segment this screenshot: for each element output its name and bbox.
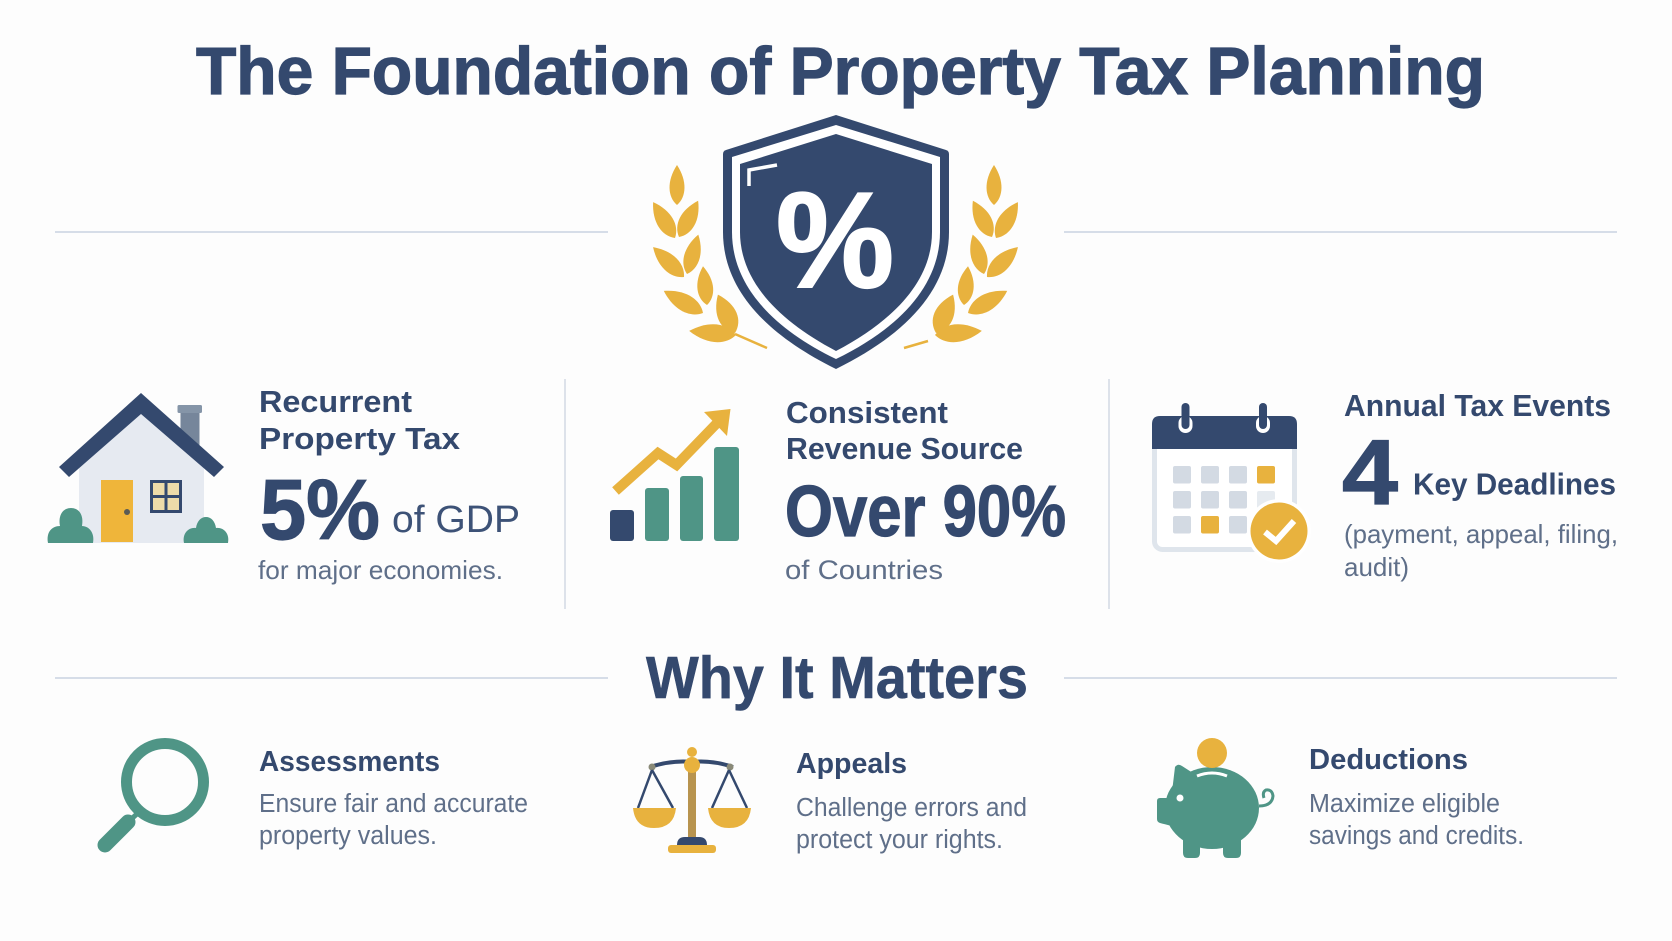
item: appeals: [633, 747, 1027, 854]
heading: annual tax events: Annual Tax Events: [1344, 388, 1611, 423]
icon: piggy bank: [1157, 738, 1273, 858]
note: of Countries: [785, 555, 943, 585]
description: Maximize eligible: [1309, 790, 1500, 818]
right laurel: [904, 165, 1025, 348]
description: Challenge errors and: [796, 794, 1027, 822]
stat: 5% of GDP: [260, 463, 520, 558]
heading: recurrent property tax: Property Tax: [259, 421, 461, 456]
note: [1344, 519, 1618, 582]
description: [1309, 790, 1524, 850]
heading: assessments: Assessments: [259, 746, 440, 778]
stat: over 90%: Over 90%: [785, 472, 1066, 552]
stat: 4 key deadlines: Key Deadlines: [1413, 466, 1616, 502]
panel: annual tax events: [1152, 388, 1618, 582]
stat: 4 key deadlines: [1342, 422, 1616, 524]
description: protect your rights.: [796, 826, 1003, 854]
title: The Foundation of Property Tax Planning: [196, 34, 1485, 109]
description: [796, 794, 1027, 854]
note: (payment, appeal, filing,: [1344, 519, 1618, 549]
heading: consistent revenue source: Consistent: [786, 395, 948, 430]
heading: recurrent property tax: [259, 384, 461, 456]
description: property values.: [259, 822, 437, 850]
description: savings and credits.: [1309, 822, 1524, 850]
stat: 5% of GDP: 5%: [260, 463, 380, 558]
percent sign: %: [776, 164, 894, 316]
heading: consistent revenue source: [786, 395, 1023, 466]
icon: calendar with check: [1152, 403, 1311, 563]
icon: magnifying glass: [105, 744, 204, 845]
stat: 4 key deadlines: 4: [1342, 422, 1398, 524]
left laurel: [646, 165, 767, 348]
heading: recurrent property tax: Recurrent: [259, 384, 412, 419]
item: assessments: [105, 744, 528, 850]
icon: bar chart with arrow: [610, 409, 739, 541]
heading: why it matters: Why It Matters: [646, 645, 1028, 711]
icon: house: [48, 393, 228, 543]
panel: consistent revenue source: [610, 395, 1066, 585]
panel: recurrent property tax: [48, 384, 520, 585]
stat: 5% of GDP: of GDP: [392, 499, 520, 541]
heading: appeals: Appeals: [796, 748, 907, 780]
note: for major economies.: [258, 555, 503, 585]
item: deductions: [1157, 738, 1524, 858]
note: audit): [1344, 552, 1409, 582]
shield: [723, 115, 949, 369]
description: [259, 790, 528, 850]
heading: deductions: Deductions: [1309, 744, 1468, 776]
icon: scales of justice: [633, 747, 751, 853]
icon: shield with percent and laurels: [646, 115, 1025, 369]
heading: consistent revenue source: Revenue Source: [786, 431, 1023, 466]
description: Ensure fair and accurate: [259, 790, 528, 818]
